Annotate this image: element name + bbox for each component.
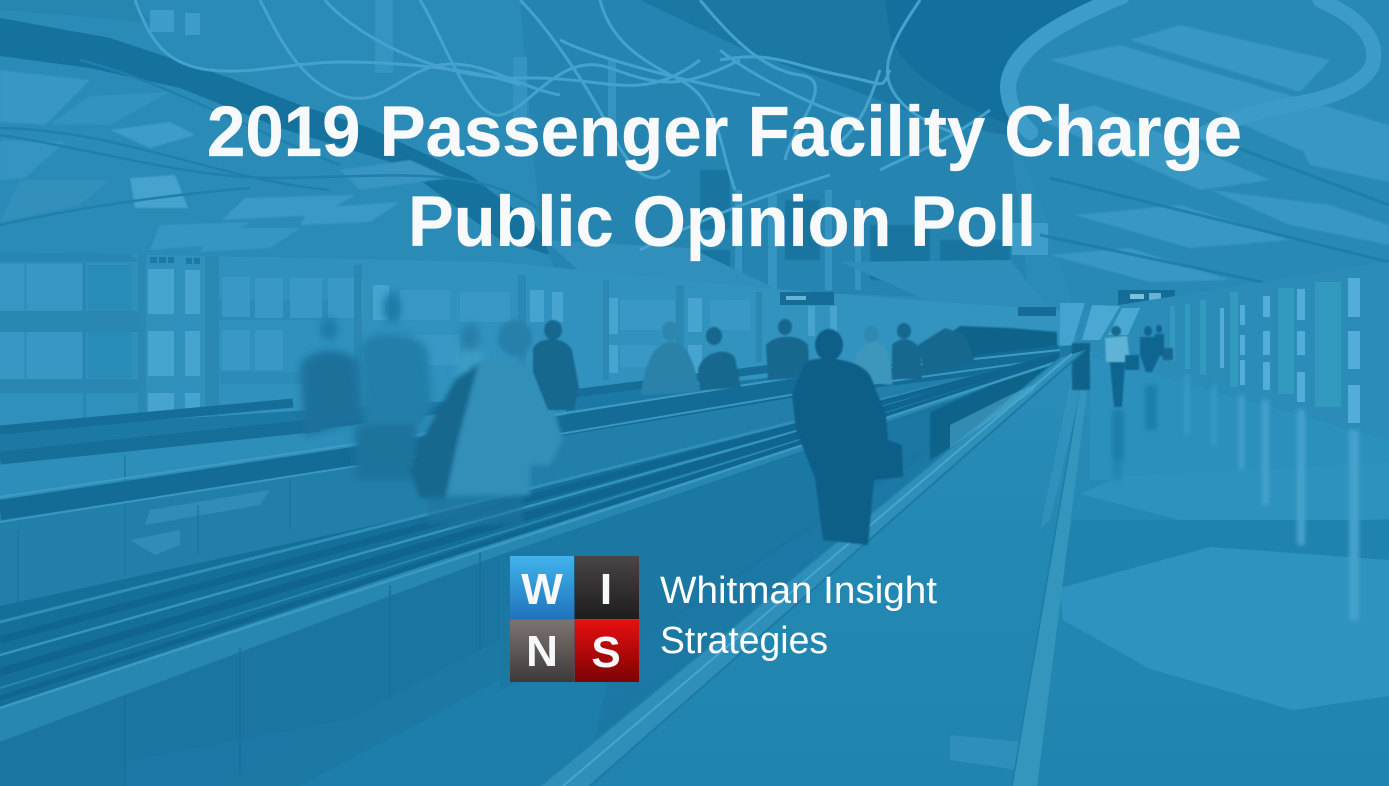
mid-distance travellers xyxy=(533,319,975,410)
title: Public Opinion Poll xyxy=(408,183,1036,262)
tangled neon ceiling wires xyxy=(135,0,990,250)
logo mark: WINS tiles: S xyxy=(591,628,621,677)
window wall, left and centre xyxy=(0,252,1075,430)
logo mark: WINS tiles: W xyxy=(521,565,563,614)
overhead signs xyxy=(780,290,1175,316)
logo wordmark: Strategies xyxy=(660,620,828,662)
floor xyxy=(585,348,1389,786)
dark ceiling oval, top centre xyxy=(640,0,1122,142)
logo mark: WINS tiles: I xyxy=(600,565,612,614)
distant crowd, dark silhouettes xyxy=(930,326,1090,460)
title xyxy=(207,93,1242,262)
near walkway edge strip xyxy=(540,350,1085,786)
logo wordmark xyxy=(660,570,937,662)
ceiling, left side xyxy=(0,0,700,270)
moving walkway body, lower left xyxy=(0,345,1078,786)
large dark traveller in foreground xyxy=(792,329,903,545)
curved ceiling tubes xyxy=(1008,0,1374,133)
right corridor wall xyxy=(1060,262,1389,440)
foreground traveller in sweater with shoulder bag xyxy=(410,320,563,525)
ceiling, right side xyxy=(1010,0,1389,312)
handrails xyxy=(0,350,1060,708)
logo mark: WINS tiles: N xyxy=(526,627,558,676)
logo wordmark: Whitman Insight xyxy=(660,570,937,612)
logo: Whitman Insight Strategies xyxy=(510,556,937,682)
ceiling, centre vista xyxy=(375,0,1050,310)
logo mark: WINS tiles xyxy=(510,556,639,682)
blurred travellers on the left xyxy=(300,293,485,480)
title: 2019 Passenger Facility Charge xyxy=(207,93,1242,172)
travellers walking on the right xyxy=(1105,325,1173,407)
